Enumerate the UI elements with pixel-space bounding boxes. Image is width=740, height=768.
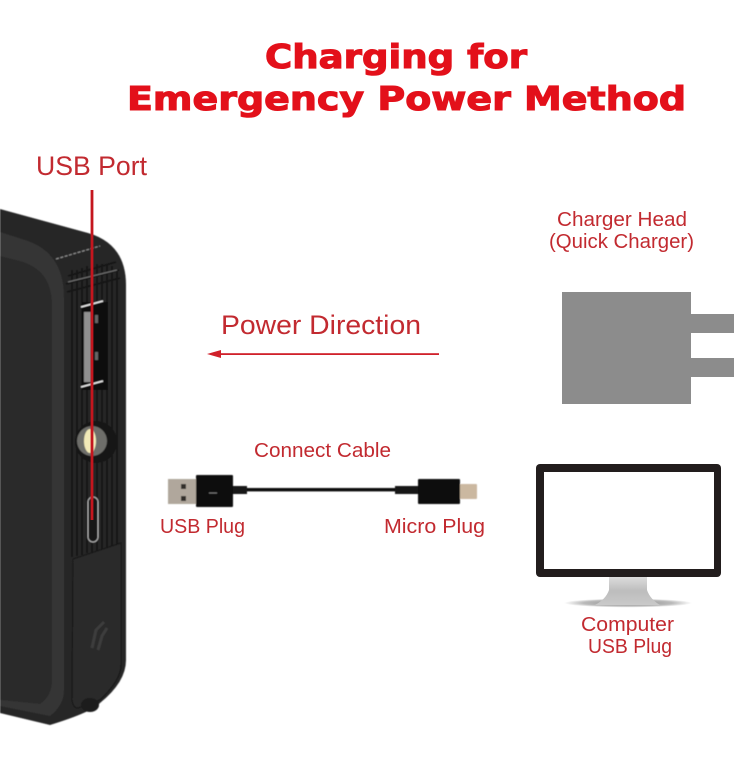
title	[127, 37, 686, 118]
top stitching	[56, 246, 100, 259]
power bank device	[0, 209, 126, 725]
ribbed side texture	[66, 262, 120, 557]
front panel	[0, 256, 52, 704]
micro plug	[395, 486, 419, 494]
port cover	[72, 543, 121, 712]
power direction label: Power Direction	[221, 310, 421, 340]
USB plug	[168, 479, 197, 504]
panel edge strip	[0, 232, 64, 716]
charger head label: (Quick Charger)	[549, 231, 694, 253]
LED button	[75, 421, 117, 463]
charger head icon	[562, 292, 734, 404]
computer monitor icon	[536, 464, 721, 608]
USB port pointer line	[91, 190, 93, 520]
title: Emergency Power Method	[127, 79, 686, 118]
micro plug label: Micro Plug	[384, 516, 485, 538]
micro port	[88, 497, 98, 542]
power direction arrow	[207, 350, 439, 358]
USB port	[81, 301, 108, 390]
wire	[247, 488, 397, 491]
computer USB plug label	[581, 614, 674, 658]
charger head label: Charger Head	[557, 209, 687, 231]
charger head label	[549, 209, 694, 253]
computer USB plug label: Computer	[581, 614, 674, 636]
computer USB plug label: USB Plug	[588, 636, 672, 658]
device body	[0, 209, 126, 725]
title: Charging for	[265, 37, 528, 76]
USB plug label: USB Plug	[160, 516, 245, 538]
USB port label: USB Port	[36, 151, 147, 181]
connect cable label: Connect Cable	[254, 440, 391, 462]
cable	[168, 475, 477, 507]
